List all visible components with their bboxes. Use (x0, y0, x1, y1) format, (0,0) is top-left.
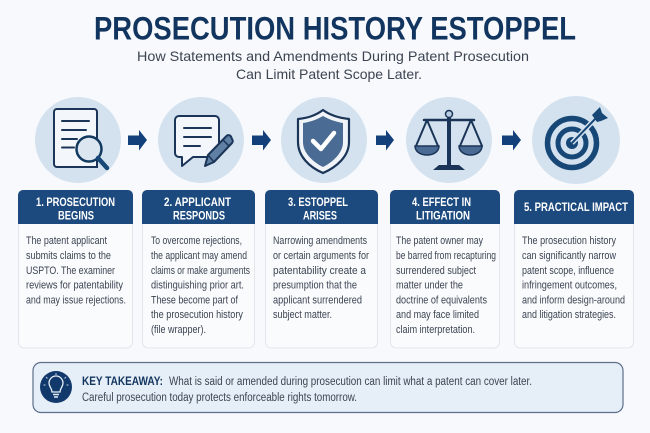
step 5 text: patent scope, influence (522, 265, 614, 277)
step 4 text (396, 235, 496, 336)
icon: balance scales (406, 97, 492, 183)
icon: speech bubble with pencil (158, 97, 244, 183)
step 2 text: distinguishing prior art. (151, 280, 244, 292)
step 4 heading: LITIGATION (416, 210, 470, 222)
step 2 heading: RESPONDS (173, 210, 225, 222)
arrow 2 (252, 130, 271, 150)
panel: step 1 (18, 190, 133, 348)
step 1 heading (36, 197, 115, 222)
step 2 heading: 2. APPLICANT (164, 197, 231, 209)
panel: step 4 (390, 190, 500, 348)
step 4 heading: 4. EFFECT IN (412, 197, 471, 209)
subtitle: How Statements and Amendments During Patent Prosecution (137, 48, 529, 64)
arrow 4 (502, 130, 521, 150)
icon: target with arrow (532, 96, 620, 184)
step 1 text: The patent applicant (26, 235, 107, 247)
step 5 heading: 5. PRACTICAL IMPACT (524, 202, 628, 214)
step 3 text: applicant surrendered (273, 294, 362, 306)
step 1 text: reviews for patentability (26, 280, 123, 292)
step 5 text: and litigation strategies. (522, 309, 616, 321)
step 4 text: be barred from recapturing (396, 250, 496, 262)
step 4 text: matter under the (396, 280, 463, 292)
takeaway text: What is said or amended during prosecution can limit what a patent can cover later. (169, 376, 532, 388)
step 3 heading: ARISES (303, 210, 337, 222)
arrow 3 (376, 130, 394, 150)
step 5 text: can significantly narrow (522, 250, 616, 262)
step 5 text: and inform design-around (522, 294, 625, 306)
step 2 text: These become part of (151, 294, 239, 306)
step 3 text: subject matter. (273, 309, 332, 321)
step 3 text: presumption that the (273, 280, 357, 292)
step 3 text: patentability create a (273, 265, 367, 277)
step 1 text (26, 235, 126, 306)
step 1 heading: 1. PROSECUTION (36, 197, 115, 209)
step 5 text: infringement outcomes, (522, 280, 617, 292)
step 3 text: or certain arguments for (273, 250, 369, 262)
takeaway text: KEY TAKEAWAY: (82, 374, 163, 388)
step 3 heading (288, 197, 348, 222)
step 2 text: the prosecution history (151, 309, 243, 321)
panel: step 5 (514, 190, 634, 348)
step 2 text (151, 235, 250, 336)
panel: step 2 (142, 190, 255, 348)
step 3 text: Narrowing amendments (273, 235, 367, 247)
subtitle (137, 48, 529, 82)
step 5 text (522, 235, 625, 321)
step 2 text: claims or make arguments (151, 265, 250, 277)
arrow 1 (128, 130, 147, 150)
subtitle: Can Limit Patent Scope Later. (236, 66, 422, 82)
step 1 text: and may issue rejections. (26, 294, 126, 306)
step 1 text: submits claims to the (26, 250, 111, 262)
icon: document with magnifier (35, 97, 121, 183)
step 2 heading (164, 197, 231, 222)
title: PROSECUTION HISTORY ESTOPPEL (94, 10, 576, 46)
panel: step 3 (265, 190, 378, 348)
step 4 text: and may face limited (396, 309, 479, 321)
step 4 text: The patent owner may (396, 235, 483, 247)
icon: shield with check (281, 97, 367, 183)
step 3 text (273, 235, 369, 321)
step 1 text: USPTO. The examiner (26, 265, 115, 277)
step 2 text: (file wrapper). (151, 324, 206, 336)
step 5 text: The prosecution history (522, 235, 616, 247)
step 4 text: doctrine of equivalents (396, 294, 487, 306)
step 4 text: surrendered subject (396, 265, 476, 277)
takeaway text: Careful prosecution today protects enforceable rights tomorrow. (82, 392, 357, 404)
step 2 text: the applicant may amend (151, 250, 247, 262)
step 1 heading: BEGINS (58, 210, 94, 222)
panel: key takeaway (33, 362, 623, 412)
step 3 heading: 3. ESTOPPEL (288, 197, 348, 209)
step 2 text: To overcome rejections, (151, 235, 242, 247)
icon: lightbulb (40, 371, 72, 403)
takeaway text (82, 374, 532, 404)
step 4 heading (412, 197, 471, 222)
step 4 text: claim interpretation. (396, 324, 475, 336)
